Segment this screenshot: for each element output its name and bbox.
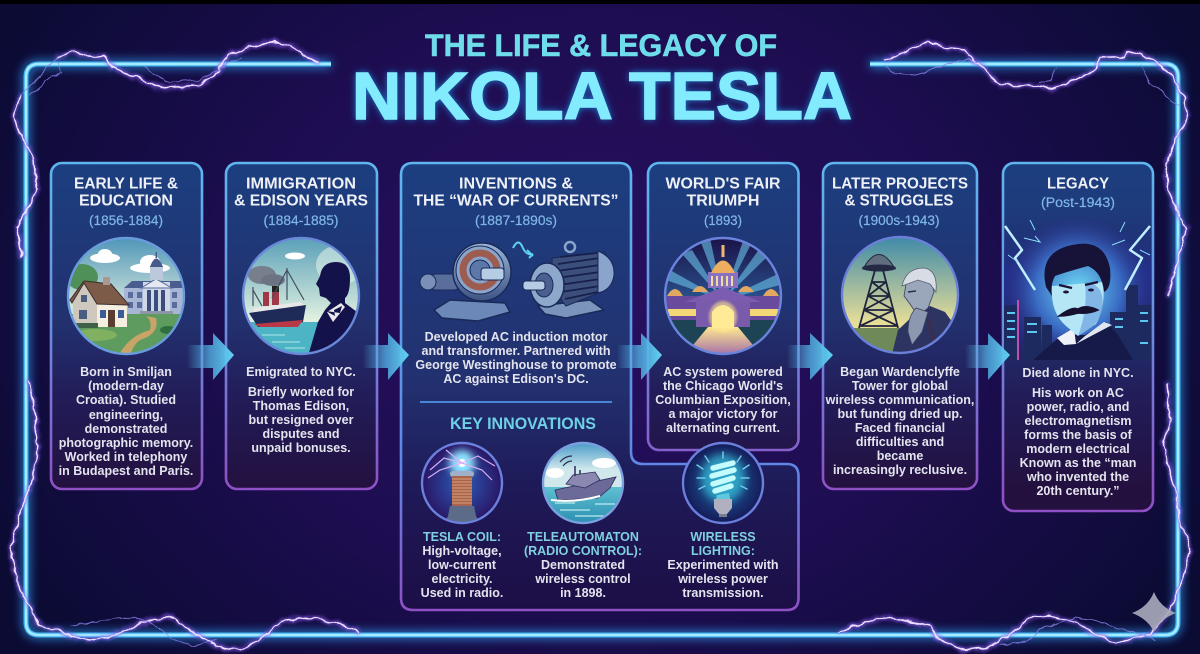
text: immigration description bbox=[246, 365, 356, 455]
text: legacy description: His work on AC bbox=[1032, 386, 1124, 400]
heading: key innovations: KEY INNOVATIONS bbox=[450, 415, 596, 433]
panel: early life and education bbox=[51, 163, 202, 489]
text: early life description: demonstrated bbox=[85, 422, 167, 436]
text: early life description: (modern-day bbox=[88, 379, 164, 393]
text: world's fair description: AC system powered bbox=[663, 365, 783, 379]
text: tesla coil: low-current bbox=[428, 558, 497, 572]
text: tesla coil: High-voltage, bbox=[422, 544, 502, 558]
text: immigration description: Briefly worked for bbox=[248, 385, 354, 399]
text: early life description: engineering, bbox=[89, 408, 163, 422]
text: legacy description: Died alone in NYC. bbox=[1022, 366, 1134, 380]
icon: house and university bbox=[66, 238, 184, 357]
text: early life description: in Budapest and Paris. bbox=[59, 464, 193, 478]
text: later projects description: Began Wardenclyffe bbox=[840, 365, 960, 379]
text: early life description bbox=[59, 365, 193, 478]
text: wireless lighting: WIRELESS bbox=[690, 530, 756, 544]
icon: ac generator bbox=[420, 243, 511, 321]
text: later projects description: difficulties and bbox=[856, 435, 944, 449]
heading: early life bbox=[74, 176, 178, 228]
text: world's fair description bbox=[655, 365, 791, 435]
text: tesla coil bbox=[421, 530, 503, 600]
text: teleautomaton: TELEAUTOMATON bbox=[527, 530, 639, 544]
text: later projects description: Faced financial bbox=[855, 421, 945, 435]
icon: columbian exposition palace bbox=[665, 238, 784, 356]
text: immigration description: unpaid bonuses. bbox=[251, 441, 351, 455]
text: legacy description: power, radio, and bbox=[1027, 400, 1129, 414]
text: later projects description: increasingly reclusive. bbox=[833, 463, 967, 477]
text: world's fair description: alternating current. bbox=[666, 421, 780, 435]
heading: later projects bbox=[832, 176, 968, 228]
text: tesla coil: Used in radio. bbox=[421, 586, 503, 600]
panel: inventions and war of currents bbox=[401, 163, 798, 610]
heading: later projects: LATER PROJECTS bbox=[832, 176, 968, 192]
text: teleautomaton: wireless control bbox=[534, 572, 631, 586]
heading: legacy bbox=[1041, 176, 1115, 210]
heading: later projects: (1900s-1943) bbox=[858, 213, 940, 228]
heading: inventions: INVENTIONS & bbox=[459, 176, 573, 192]
heading: inventions bbox=[414, 176, 618, 228]
text: legacy description: Known as the “man bbox=[1020, 456, 1136, 470]
heading: immigration bbox=[234, 176, 368, 228]
text: tesla coil: electricity. bbox=[432, 572, 492, 586]
text: teleautomaton: Demonstrated bbox=[541, 558, 625, 572]
arrow: early life to immigration bbox=[187, 333, 234, 380]
icon: wireless lighting bulb bbox=[683, 443, 763, 523]
heading: legacy: LEGACY bbox=[1047, 176, 1109, 192]
text: later projects description: became bbox=[877, 449, 923, 463]
text: inventions description: AC against Edison's DC. bbox=[443, 372, 589, 386]
text: tesla coil: TESLA COIL: bbox=[423, 530, 501, 544]
arrow: inventions to world's fair bbox=[617, 333, 662, 380]
text: legacy description: forms the basis of bbox=[1024, 428, 1133, 442]
heading: world's fair: (1893) bbox=[704, 213, 742, 228]
panel: legacy bbox=[1003, 163, 1153, 511]
text: legacy description: 20th century.” bbox=[1036, 484, 1120, 498]
text: legacy description: electromagnetism bbox=[1025, 414, 1131, 428]
text: immigration description: but resigned over bbox=[249, 413, 354, 427]
text: immigration description: disputes and bbox=[262, 427, 340, 441]
text: early life description: Croatia). Studied bbox=[76, 393, 176, 407]
icon: tesla coil bbox=[420, 442, 504, 526]
text: world's fair description: a major victory for bbox=[668, 407, 778, 421]
heading: immigration: IMMIGRATION bbox=[246, 176, 356, 192]
heading: world's fair bbox=[666, 176, 781, 228]
heading: inventions: THE “WAR OF CURRENTS” bbox=[414, 192, 618, 210]
text: inventions description bbox=[415, 330, 617, 386]
text: inventions description: George Westinghouse to promote bbox=[415, 358, 617, 372]
title: THE LIFE & LEGACY OF bbox=[425, 27, 777, 63]
top black strip bbox=[0, 0, 1200, 4]
text: wireless lighting: LIGHTING: bbox=[691, 544, 755, 558]
panel: immigration and edison years bbox=[226, 163, 377, 489]
text: later projects description: Tower for global bbox=[852, 379, 948, 393]
icon: wardenclyffe tower and tesla bbox=[842, 237, 958, 354]
text: inventions description: Developed AC induction motor bbox=[425, 330, 608, 344]
text: teleautomaton: (RADIO CONTROL): bbox=[524, 544, 642, 558]
text: legacy description: who invented the bbox=[1026, 470, 1129, 484]
text: early life description: Born in Smiljan bbox=[80, 365, 172, 379]
heading: early life: EARLY LIFE & bbox=[74, 176, 178, 192]
heading: inventions: (1887-1890s) bbox=[475, 213, 557, 228]
icon: sparkle watermark bbox=[1132, 592, 1176, 632]
text: legacy description: modern electrical bbox=[1026, 442, 1130, 456]
text: world's fair description: Columbian Exposition, bbox=[655, 393, 791, 407]
heading: early life: EDUCATION bbox=[79, 192, 173, 210]
heading: legacy: (Post-1943) bbox=[1041, 195, 1115, 210]
text: wireless lighting: Experimented with bbox=[667, 558, 779, 572]
text: later projects description: wireless communication, bbox=[825, 393, 974, 407]
icon: radio controlled boat bbox=[543, 443, 623, 525]
icon: wave arrow bbox=[513, 242, 533, 258]
title: NIKOLA TESLA bbox=[352, 59, 852, 134]
text: world's fair description: the Chicago World's bbox=[663, 379, 783, 393]
text: wireless lighting: wireless power bbox=[677, 572, 768, 586]
title: NIKOLA TESLA bbox=[352, 59, 852, 134]
text: later projects description: but funding dried up. bbox=[838, 407, 962, 421]
text: teleautomaton bbox=[524, 530, 642, 600]
text: later projects description bbox=[825, 365, 974, 477]
text: legacy description bbox=[1020, 366, 1136, 498]
text: immigration description: Thomas Edison, bbox=[253, 399, 349, 413]
text: wireless lighting: transmission. bbox=[682, 586, 764, 600]
text: early life description: Worked in telephony bbox=[65, 450, 187, 464]
divider bbox=[420, 401, 612, 403]
title bbox=[352, 27, 852, 134]
arrow: immigration to inventions bbox=[363, 333, 409, 380]
icon: steamship and edison silhouette bbox=[243, 238, 364, 356]
text: wireless lighting bbox=[667, 530, 779, 600]
heading: later projects: & STRUGGLES bbox=[844, 192, 954, 210]
heading: immigration: & EDISON YEARS bbox=[234, 192, 368, 210]
panel: world's fair triumph bbox=[648, 163, 798, 450]
text: early life description: photographic memory. bbox=[59, 436, 193, 450]
arrow: world's fair to later projects bbox=[787, 333, 833, 380]
arrow: later projects to legacy bbox=[965, 333, 1010, 380]
heading: world's fair: WORLD'S FAIR bbox=[666, 176, 781, 192]
illustration: tesla portrait with lightning and city bbox=[1004, 212, 1151, 364]
heading: world's fair: TRIUMPH bbox=[686, 192, 760, 210]
panel: later projects and struggles bbox=[823, 163, 977, 489]
text: teleautomaton: in 1898. bbox=[560, 586, 606, 600]
text: inventions description: and transformer. Partnered with bbox=[422, 344, 610, 358]
heading: immigration: (1884-1885) bbox=[264, 213, 338, 228]
icon: ac induction motor bbox=[523, 242, 614, 318]
text: immigration description: Emigrated to NYC. bbox=[246, 365, 356, 379]
heading: early life: (1856-1884) bbox=[89, 213, 163, 228]
